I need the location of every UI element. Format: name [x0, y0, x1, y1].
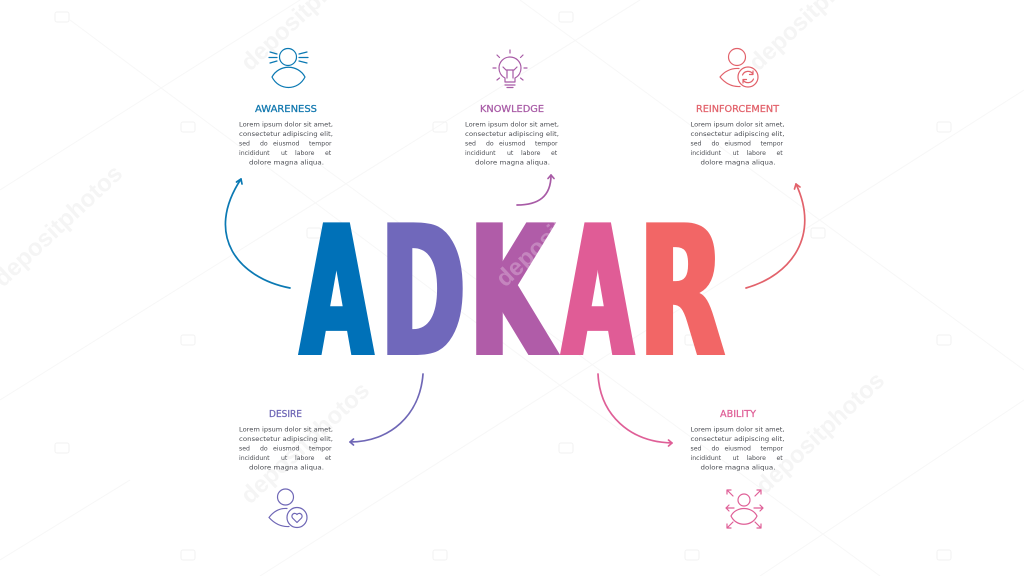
- text block: desire: Lorem ipsum dolor sit amet,: [239, 426, 333, 434]
- title: ADKAR letters: K: [469, 188, 557, 399]
- panel: desire: [239, 409, 333, 528]
- text block: knowledge: eiusmod: [499, 140, 525, 148]
- heading: reinforcement: REINFORCEMENT: [696, 104, 779, 115]
- text block: ability: et: [776, 455, 783, 462]
- arrow: reinforcement: [746, 184, 805, 288]
- text block: reinforcement: labore: [746, 150, 766, 157]
- text block: reinforcement: et: [776, 150, 783, 157]
- text block: desire: dolore magna aliqua.: [249, 464, 324, 472]
- text block: knowledge: sed: [465, 140, 476, 148]
- arrow: knowledge: [517, 175, 554, 205]
- text block: awareness: dolore magna aliqua.: [249, 160, 324, 166]
- text block: ability: Lorem ipsum dolor sit amet,: [690, 426, 785, 434]
- title: ADKAR letters: A: [300, 187, 372, 399]
- text block: knowledge: do: [486, 140, 494, 148]
- icon: ability: [726, 490, 763, 528]
- title: ADKAR letters: D: [381, 186, 465, 398]
- text block: reinforcement: ut: [732, 150, 739, 157]
- text block: knowledge: Lorem ipsum dolor sit amet,: [465, 122, 559, 128]
- text block: awareness: ut: [281, 150, 288, 157]
- text block: reinforcement: eiusmod: [724, 140, 751, 148]
- text block: knowledge: incididunt: [465, 150, 496, 157]
- text: depositphotos: [236, 377, 375, 509]
- text block: knowledge: labore: [521, 150, 541, 157]
- text block: desire: tempor: [309, 446, 332, 452]
- text block: reinforcement: dolore magna aliqua.: [700, 160, 776, 166]
- heading: awareness: AWARENESS: [255, 104, 317, 115]
- text block: desire: ut: [281, 455, 288, 462]
- text block: awareness: do: [260, 140, 268, 148]
- title: ADKAR letters: A: [562, 186, 633, 398]
- text block: awareness: incididunt: [239, 150, 270, 157]
- icon: awareness: [269, 48, 308, 88]
- text block: awareness: tempor: [309, 140, 332, 148]
- arrow: ability: [598, 374, 672, 446]
- text block: ability: sed: [690, 446, 702, 452]
- text block: reinforcement: Lorem ipsum dolor sit amet,: [690, 122, 785, 128]
- text block: ability: consectetur adipiscing elit,: [690, 436, 785, 443]
- text block: ability: labore: [746, 455, 766, 462]
- text block: awareness: sed: [239, 140, 250, 148]
- text block: ability: dolore magna aliqua.: [700, 464, 776, 472]
- text block: ability: ut: [732, 455, 739, 462]
- panel: knowledge: [465, 50, 559, 166]
- arrow: desire: [350, 374, 423, 445]
- text block: reinforcement: sed: [690, 140, 702, 148]
- text block: awareness: Lorem ipsum dolor sit amet,: [239, 122, 333, 128]
- text: depositphotos: [491, 160, 630, 292]
- text block: knowledge: ut: [507, 150, 514, 157]
- text: depositphotos: [751, 367, 890, 499]
- text block: desire: sed: [239, 446, 250, 452]
- text block: awareness: et: [325, 150, 332, 157]
- text block: ability: do: [712, 446, 719, 452]
- text block: awareness: consectetur adipiscing elit,: [239, 131, 333, 138]
- heading: desire: DESIRE: [269, 409, 302, 420]
- text block: desire: labore: [295, 455, 315, 462]
- title: ADKAR letters: R: [639, 186, 724, 398]
- title: ADKAR letters: [300, 186, 724, 399]
- icon: lightbulb: [493, 50, 527, 88]
- text block: awareness: labore: [295, 150, 315, 157]
- panel: reinforcement: [690, 48, 785, 166]
- text block: desire: consectetur adipiscing elit,: [239, 436, 333, 443]
- text block: ability: eiusmod: [724, 446, 751, 452]
- text block: desire: do: [260, 446, 268, 452]
- heading: knowledge: KNOWLEDGE: [480, 104, 544, 115]
- text block: desire: incididunt: [239, 455, 270, 462]
- text block: awareness: eiusmod: [273, 140, 299, 148]
- text block: knowledge: consectetur adipiscing elit,: [465, 131, 559, 138]
- text block: ability: tempor: [760, 446, 783, 452]
- text block: knowledge: dolore magna aliqua.: [475, 160, 550, 166]
- panel: awareness: [239, 48, 333, 166]
- text block: reinforcement: tempor: [760, 140, 783, 148]
- text block: desire: et: [325, 455, 332, 462]
- heading: ability: ABILITY: [720, 409, 756, 420]
- text block: knowledge: et: [551, 150, 558, 157]
- panel: ability: [690, 409, 785, 528]
- text block: desire: eiusmod: [273, 446, 299, 452]
- text block: reinforcement: consectetur adipiscing elit,: [690, 131, 785, 138]
- text block: reinforcement: do: [712, 140, 719, 148]
- arrow: awareness: [225, 179, 290, 288]
- text block: knowledge: tempor: [535, 140, 558, 148]
- icon: reinforcement: [720, 48, 758, 87]
- text block: reinforcement: incididunt: [690, 150, 722, 157]
- icon: desire: [269, 489, 307, 528]
- text block: ability: incididunt: [690, 455, 722, 462]
